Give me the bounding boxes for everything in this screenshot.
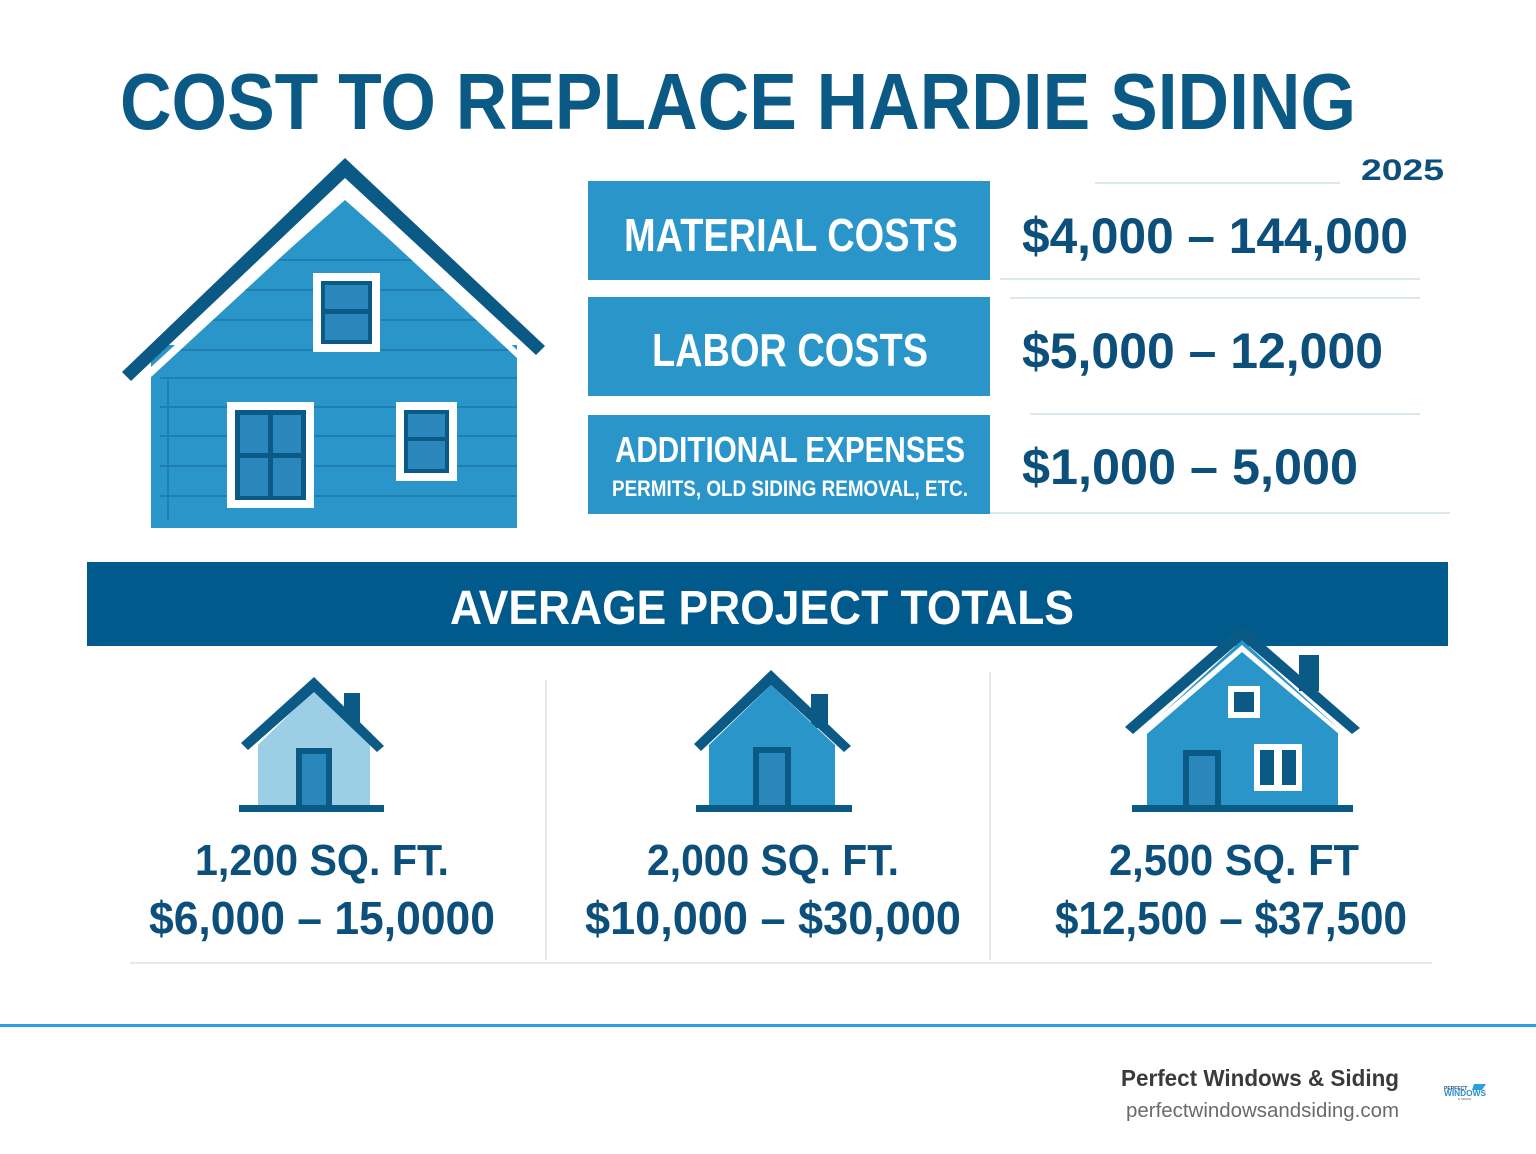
icon: large house 2500: [1125, 625, 1360, 812]
text: 2000 sq ft: 2,000 SQ. FT.: [647, 836, 899, 885]
text: 1200 sq ft: 1,200 SQ. FT.: [195, 836, 449, 885]
panel: labor costs: [588, 297, 1383, 396]
text: 2500 sq ft: [1055, 836, 1407, 944]
banner: average project totals: AVERAGE PROJECT TOTALS: [450, 582, 1074, 635]
icon: logo: WINDOWS: [1444, 1089, 1487, 1098]
panel: additional expenses: [588, 415, 1358, 514]
icon: medium house 2000: [694, 670, 852, 812]
banner: average project totals: [87, 562, 1448, 646]
panel: material costs: [588, 181, 1408, 280]
icon: small house 1200: [239, 677, 384, 812]
text: 2000 sq ft: [585, 836, 961, 944]
illustration: large house: [122, 158, 545, 528]
panel: labor costs: $5,000 – 12,000: [1022, 323, 1383, 379]
footer: company name and url: [1121, 1065, 1399, 1122]
year label: 2025: [1361, 154, 1444, 187]
panel: labor costs: LABOR COSTS: [652, 324, 928, 376]
text: 2500 sq ft: $12,500 – $37,500: [1055, 892, 1407, 944]
panel: material costs: MATERIAL COSTS: [624, 209, 958, 261]
panel: material costs: $4,000 – 144,000: [1022, 208, 1408, 264]
text: 2000 sq ft: $10,000 – $30,000: [585, 892, 961, 944]
panel: additional expenses: PERMITS, OLD SIDING REMOVAL, ETC.: [612, 476, 968, 501]
icon: logo: & SIDING: [1458, 1097, 1472, 1101]
icon: logo: PERFECT: [1444, 1086, 1467, 1092]
text: 1200 sq ft: [149, 836, 495, 944]
footer: company name and url: perfectwindowsandsiding.com: [1126, 1100, 1399, 1122]
icon: logo: [1444, 1084, 1487, 1101]
title: COST TO REPLACE HARDIE SIDING: [120, 57, 1356, 146]
text: 2500 sq ft: 2,500 SQ. FT: [1109, 836, 1359, 885]
panel: additional expenses: $1,000 – 5,000: [1022, 439, 1358, 495]
panel: additional expenses: ADDITIONAL EXPENSES: [615, 429, 965, 470]
text: 1200 sq ft: $6,000 – 15,0000: [149, 892, 495, 944]
footer: company name and url: Perfect Windows & Siding: [1121, 1065, 1399, 1091]
